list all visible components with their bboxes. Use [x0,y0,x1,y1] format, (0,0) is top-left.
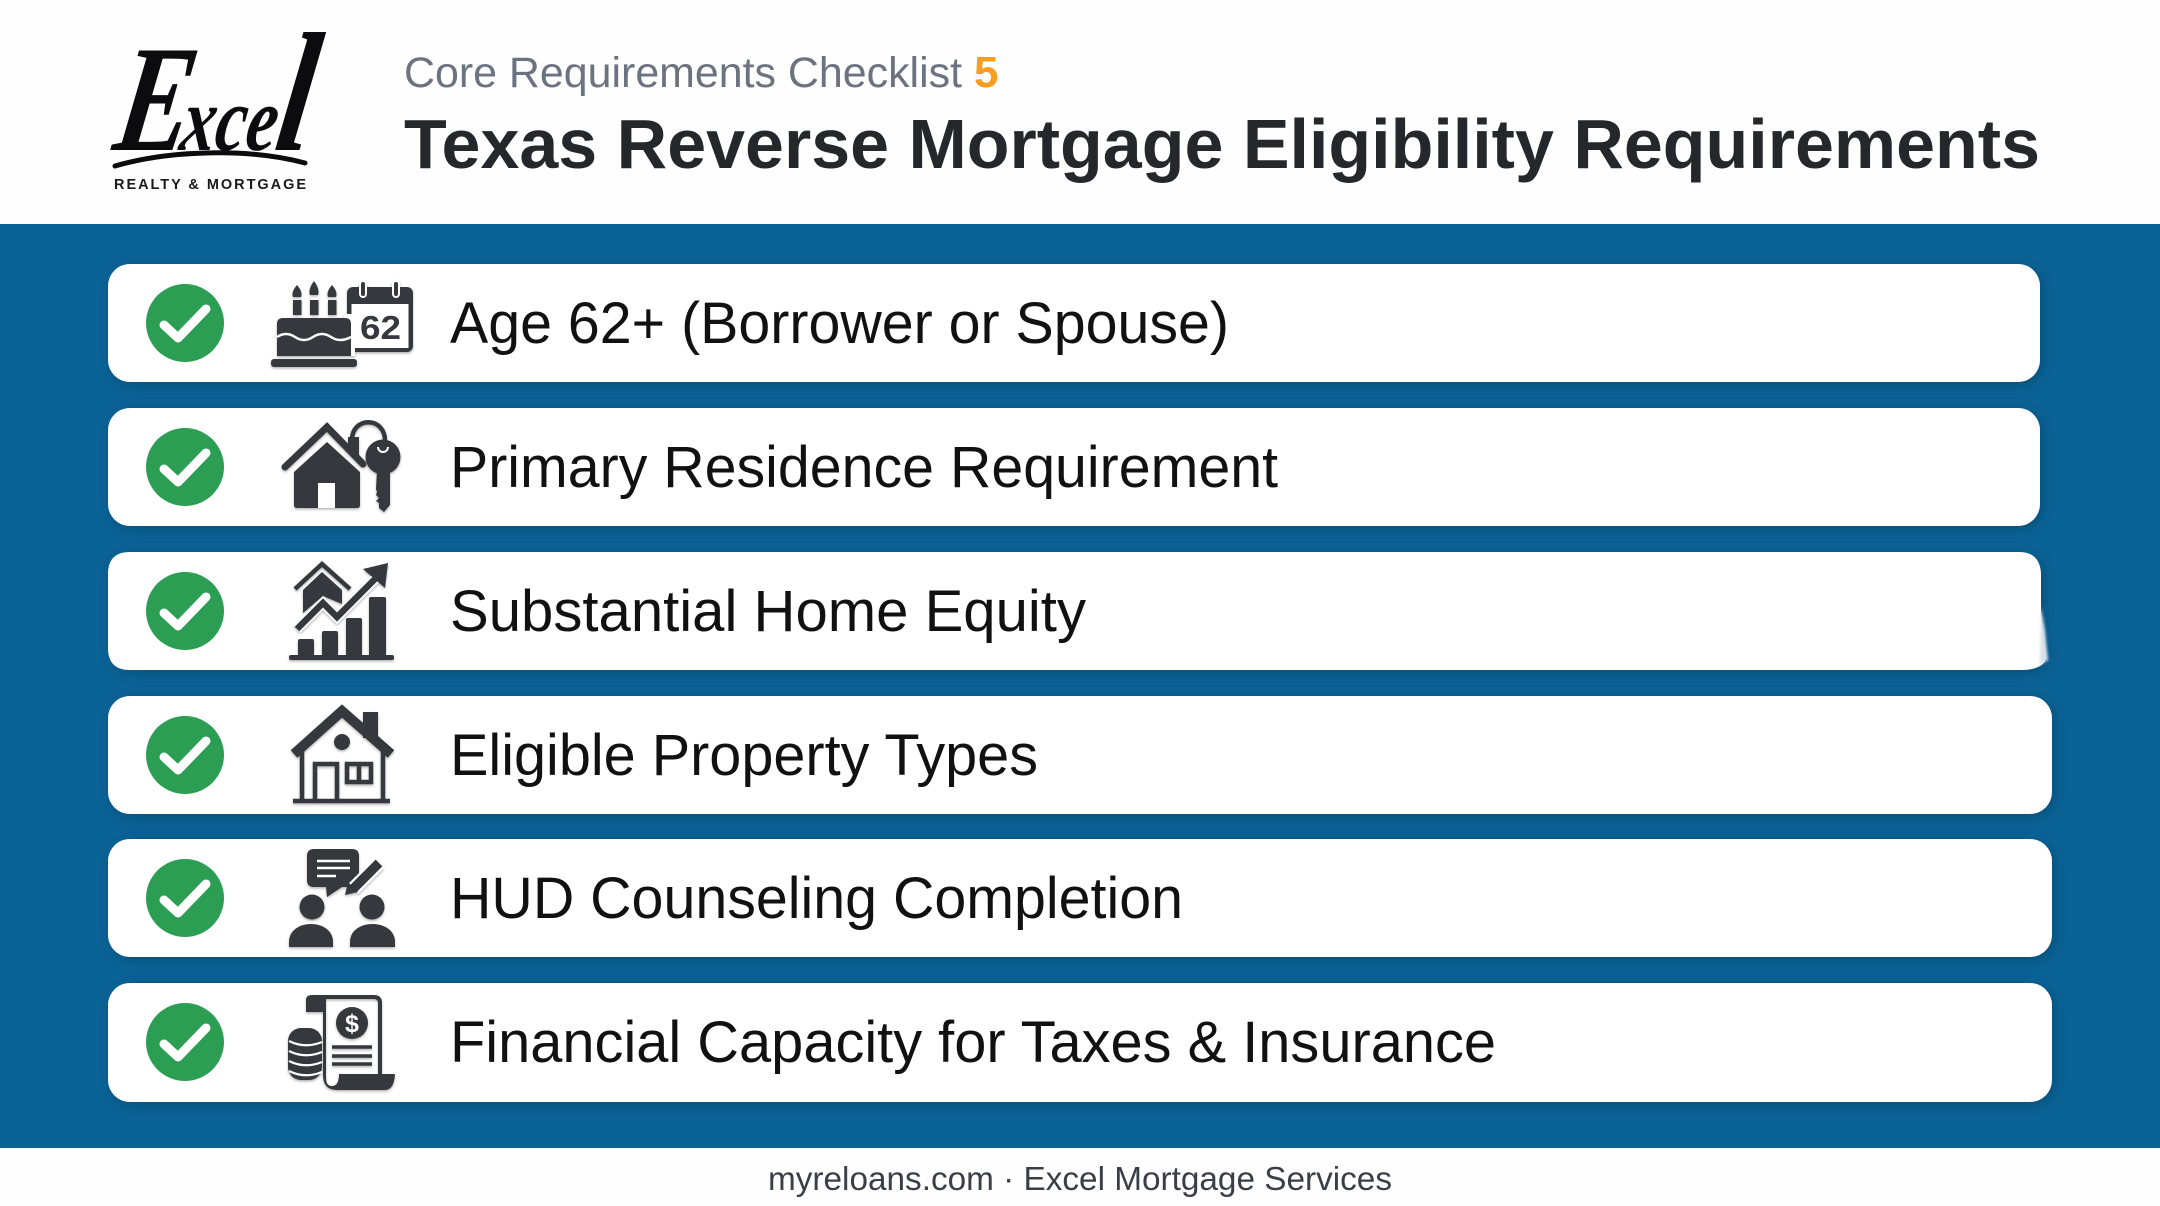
footer: myreloans.com · Excel Mortgage Services [768,1160,1392,1197]
subtitle: Core Requirements Checklist 5: Core Requirements Checklist [404,49,962,97]
check icon [146,859,224,937]
icon: birthday cake and calendar 62: 62 [360,309,401,346]
check icon [146,572,224,650]
label: Age 62+ (Borrower or Spouse) [450,291,1229,356]
flare artefact [2040,606,2048,665]
icon: counseling people, speech bubble and pencil [289,849,395,947]
icon: house [293,711,391,801]
row: HUD Counseling [108,839,2052,957]
label: Financial Capacity for Taxes & Insurance [450,1010,1496,1075]
title: Texas Reverse Mortgage Eligibility Requirements [404,105,2040,183]
row: Primary Residence [108,408,2040,526]
icon: birthday cake and calendar 62 [271,281,413,367]
row: Substantial Home Equity [108,552,2048,670]
icon: coins and bill: $ [345,1010,359,1038]
panel: blue checklist band [0,224,2160,1148]
logo: Excel Realty & Mortgage: REALTY & MORTGAGE [114,177,306,193]
check icon [146,1003,224,1081]
label: Eligible Property Types [450,723,1038,788]
icon: house and key [285,422,400,512]
row: Age 62+ [108,264,2040,382]
check icon [146,284,224,362]
row: Financial Capacity [108,983,2052,1102]
icon: home value chart with arrow [289,563,394,660]
check icon [146,428,224,506]
label: HUD Counseling Completion [450,866,1183,931]
icon: coins and bill [288,995,395,1090]
label: Substantial Home Equity [450,579,1086,644]
check icon [146,716,224,794]
subtitle: Core Requirements Checklist 5: 5 [974,48,998,97]
row: Eligible Property Types [108,696,2052,814]
label: Primary Residence Requirement [450,435,1278,500]
logo: Excel Realty & Mortgage: Excel [104,0,332,187]
